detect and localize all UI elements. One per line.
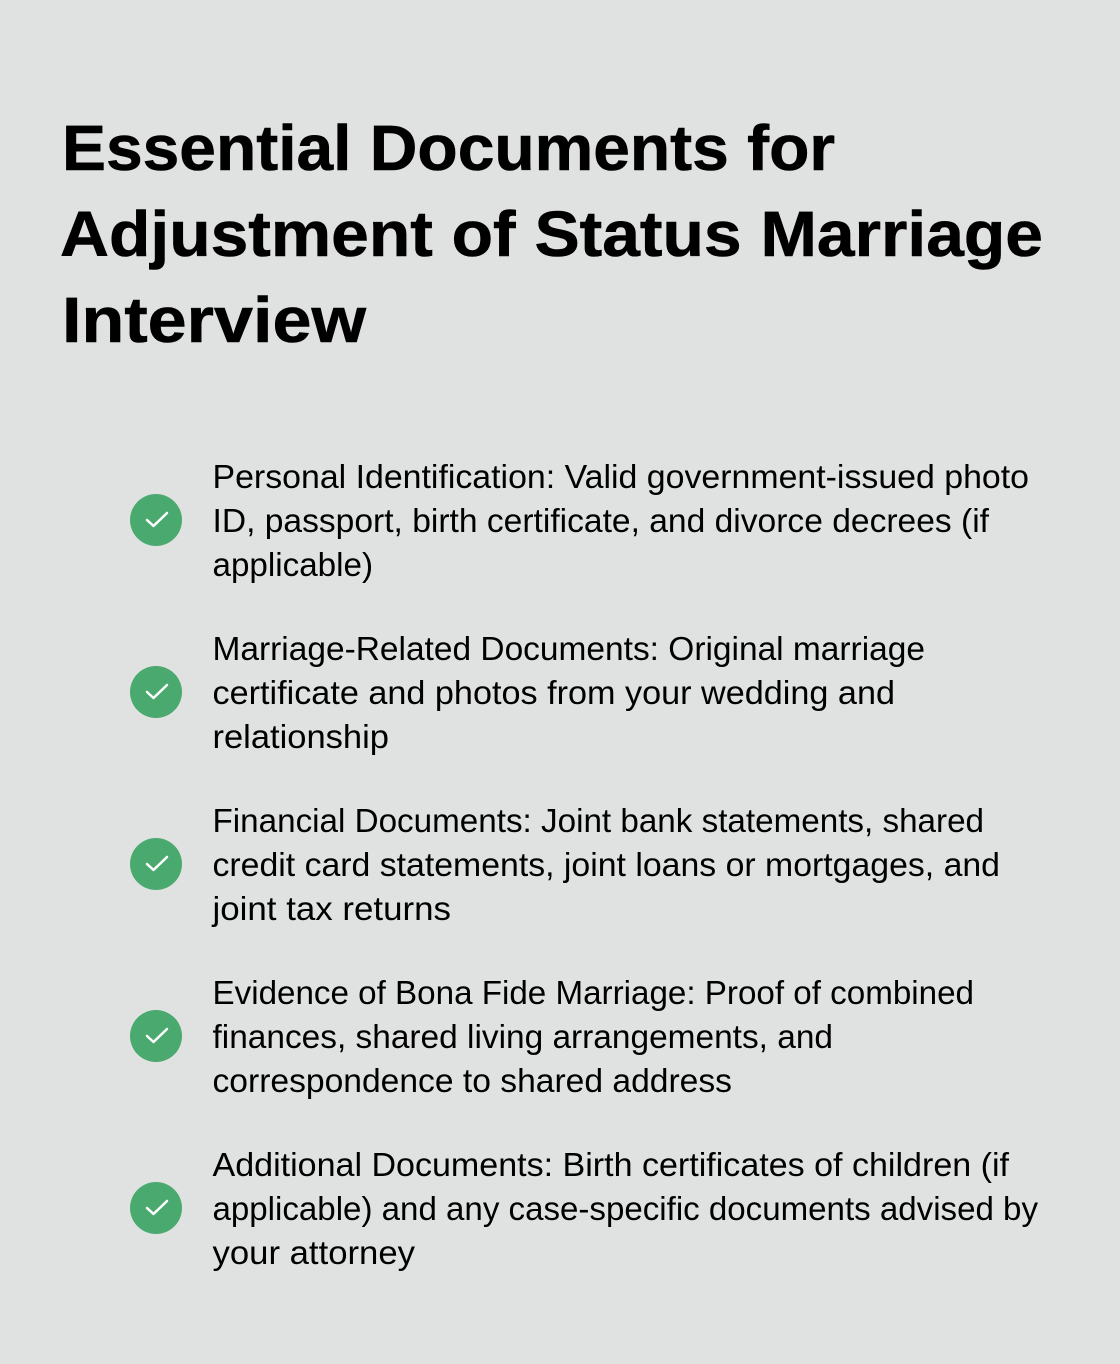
list item: additional documents bbox=[130, 1146, 1038, 1271]
text: marriage-related documents bbox=[212, 630, 925, 755]
icon: check circle bbox=[130, 1182, 182, 1234]
text: evidence of bona fide marriage: finances, shared living arrangements, and bbox=[212, 1018, 833, 1055]
text: financial documents: credit card statements, joint loans or mortgages, and bbox=[212, 846, 1000, 883]
text: additional documents: applicable) and any case-specific documents advised by bbox=[212, 1190, 1038, 1227]
text: additional documents bbox=[212, 1146, 1038, 1271]
text: personal identification: Personal Identification: Valid government-issued photo bbox=[212, 458, 1029, 495]
text: financial documents: joint tax returns bbox=[211, 890, 451, 927]
text: financial documents: Financial Documents: Joint bank statements, shared bbox=[212, 802, 984, 839]
text: evidence of bona fide marriage: Evidence of Bona Fide Marriage: Proof of combined bbox=[212, 974, 974, 1011]
text: marriage-related documents: Marriage-Related Documents: Original marriage bbox=[212, 630, 925, 667]
list item: marriage-related documents bbox=[130, 630, 925, 755]
text: personal identification: applicable) bbox=[212, 546, 373, 583]
text: marriage-related documents: relationship bbox=[212, 718, 389, 755]
icon: check circle bbox=[130, 838, 182, 890]
icon: check circle bbox=[130, 666, 182, 718]
text: evidence of bona fide marriage bbox=[212, 974, 974, 1099]
title: Essential Documents for bbox=[62, 112, 835, 184]
text: evidence of bona fide marriage: correspondence to shared address bbox=[212, 1062, 732, 1099]
text: additional documents: Additional Documents: Birth certificates of children (if bbox=[212, 1146, 1010, 1183]
icon: check circle bbox=[130, 1010, 182, 1062]
list item: personal identification bbox=[130, 458, 1029, 583]
title bbox=[60, 112, 1043, 356]
text: personal identification bbox=[212, 458, 1029, 583]
title: Interview bbox=[62, 284, 366, 356]
title: Adjustment of Status Marriage bbox=[60, 198, 1043, 270]
text: marriage-related documents: certificate and photos from your wedding and bbox=[212, 674, 895, 711]
text: financial documents bbox=[211, 802, 1000, 927]
text: personal identification: ID, passport, birth certificate, and divorce decrees (if bbox=[212, 502, 990, 539]
icon: check circle bbox=[130, 494, 182, 546]
text: additional documents: your attorney bbox=[212, 1234, 416, 1271]
list item: financial documents bbox=[130, 802, 1000, 927]
list item: evidence of bona fide marriage bbox=[130, 974, 974, 1099]
